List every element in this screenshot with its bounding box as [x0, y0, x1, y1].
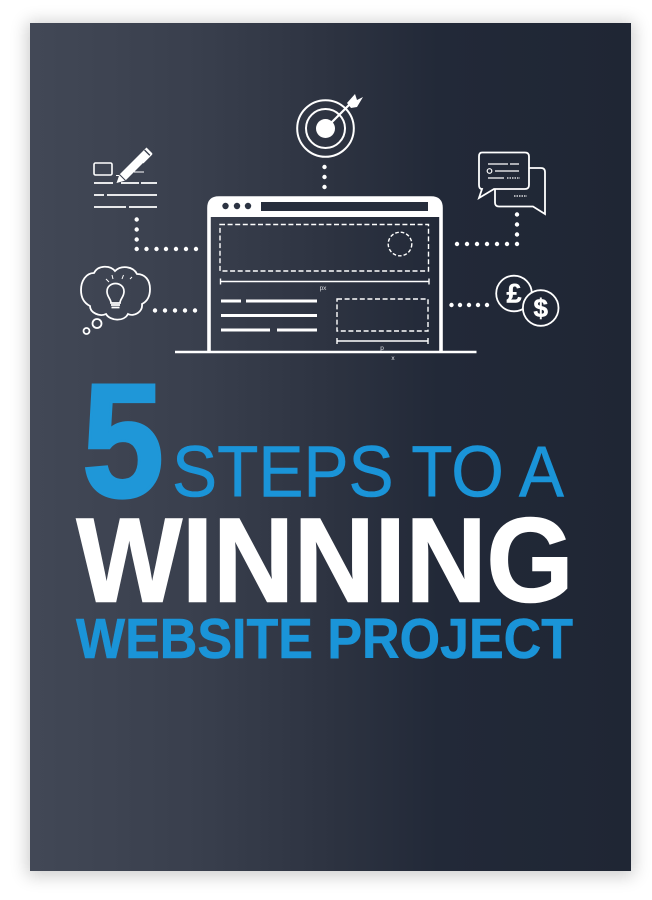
icon: pound and dollar coins: £ — [506, 278, 522, 308]
icon: browser window: x — [391, 355, 395, 362]
title: steps to a: STEPS TO A — [172, 432, 564, 512]
title: website project: WEBSITE PROJECT — [76, 607, 573, 671]
icon: pound and dollar coins: $ — [533, 293, 548, 323]
title: winning: WINNING — [76, 494, 574, 628]
icon: target with arrow — [297, 94, 363, 157]
icon: chat bubbles — [479, 152, 545, 214]
icon: browser window — [175, 198, 476, 362]
connector dots: target — [322, 165, 327, 189]
connector dots: pencil to browser — [134, 217, 198, 251]
icon: thought cloud with light bulb — [81, 267, 150, 334]
icon: pencil and document — [94, 148, 157, 207]
connector dots: cloud to browser — [153, 308, 197, 313]
title: number 5: 5 — [82, 350, 164, 532]
connector dots: coins to browser — [449, 303, 489, 307]
connector dots: chat to browser — [455, 212, 519, 246]
icon: pound and dollar coins — [496, 276, 558, 326]
icon: browser window: px — [320, 285, 327, 292]
icon: browser window: p — [380, 345, 384, 352]
